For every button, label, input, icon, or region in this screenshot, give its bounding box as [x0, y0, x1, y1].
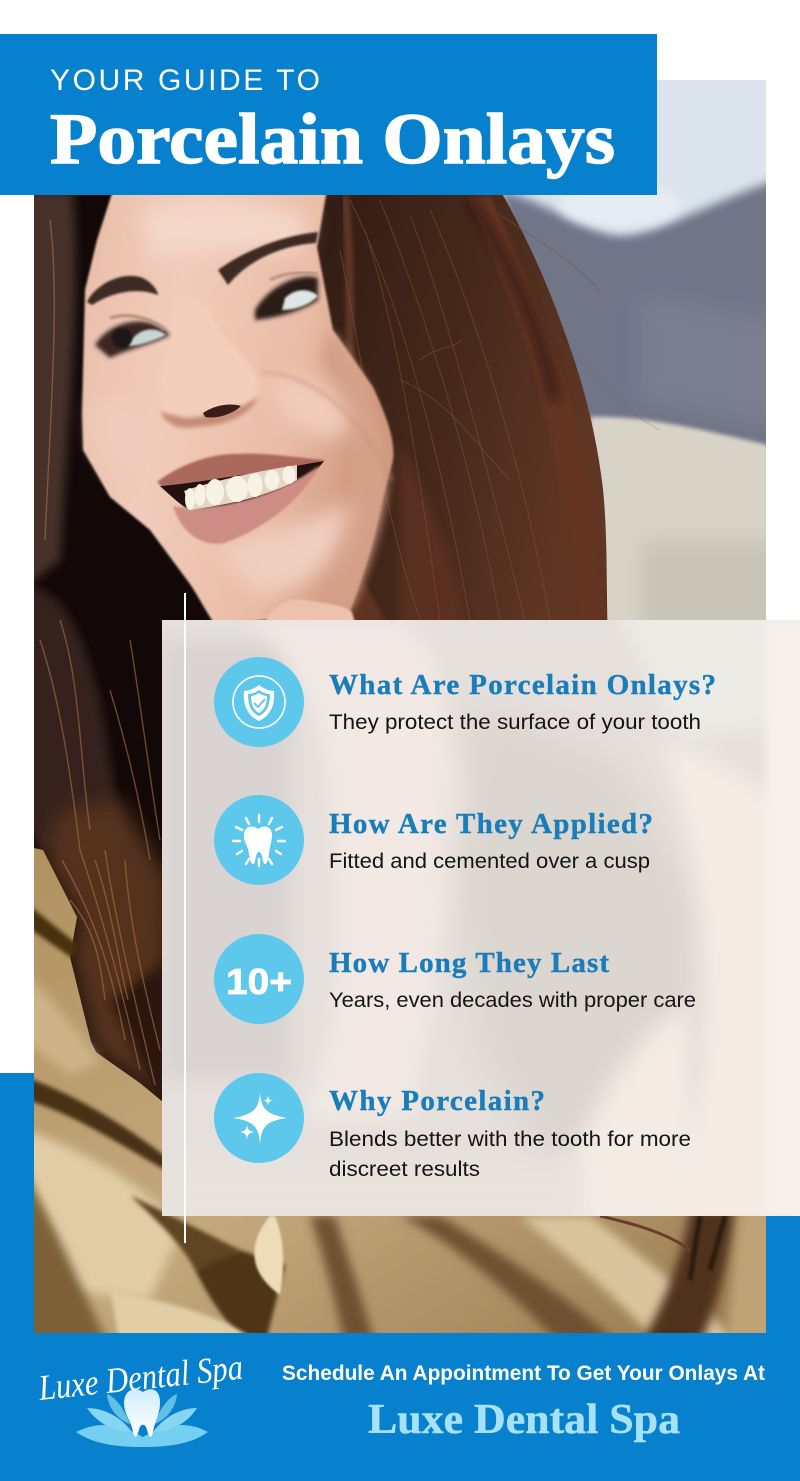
heading: why porcelain: Why Porcelain?	[329, 1085, 545, 1117]
icon: ten plus years	[214, 934, 304, 1024]
right eye	[255, 277, 318, 320]
heading: how long they last: How Long They Last	[329, 947, 609, 979]
logo: script wordmark: Luxe Dental Spa	[36, 1347, 245, 1408]
heading: what are porcelain onlays: What Are Porcelain Onlays?	[329, 669, 716, 701]
mouth: lower lip	[173, 465, 320, 544]
footer: practice name: Luxe Dental Spa	[368, 1397, 680, 1443]
photo: face	[82, 190, 393, 625]
photo: hair right side	[300, 190, 660, 640]
icon: shield	[214, 657, 304, 747]
text: why porcelain second line: discreet results	[329, 1158, 480, 1181]
logo: lotus petals	[76, 1394, 208, 1447]
vertical white accent line	[184, 593, 186, 1243]
text: what are porcelain onlays: They protect the surface of your tooth	[329, 711, 701, 734]
footer call to action	[282, 1362, 765, 1443]
mouth: teeth	[184, 465, 297, 510]
title banner	[0, 34, 657, 195]
icon: ten plus years: 10+	[226, 961, 292, 1002]
icon: shining tooth	[214, 795, 304, 885]
left eye	[95, 321, 170, 358]
title: eyebrow: YOUR GUIDE TO	[50, 64, 320, 97]
mouth: interior	[160, 461, 324, 514]
photo: finger under chin	[265, 599, 356, 620]
logo: Luxe Dental Spa	[36, 1347, 245, 1447]
text: why porcelain: Blends better with the tooth for more	[329, 1128, 691, 1151]
text: how long they last: Years, even decades with proper care	[329, 989, 696, 1012]
mouth: upper lip	[157, 454, 325, 490]
right eyebrow	[218, 232, 318, 285]
background: blue lower block	[0, 1073, 800, 1481]
text: how are they applied: Fitted and cemented over a cusp	[329, 850, 650, 873]
panel: frosted background	[162, 600, 800, 1230]
title: main: Porcelain Onlays	[50, 99, 615, 179]
panel: frosted information card	[162, 600, 800, 1230]
heading: how are they applied: How Are They Applied?	[329, 808, 653, 840]
photo: hair left side	[34, 195, 268, 1102]
left eyebrow	[87, 276, 158, 305]
photo: gold robe	[10, 845, 790, 1345]
nose	[208, 336, 260, 410]
logo: tooth	[124, 1389, 160, 1437]
icon: sparkle	[214, 1073, 304, 1163]
photo background: sky, mountain and sand	[34, 80, 790, 640]
footer: schedule line: Schedule An Appointment To Get Your Onlays At	[282, 1362, 765, 1385]
